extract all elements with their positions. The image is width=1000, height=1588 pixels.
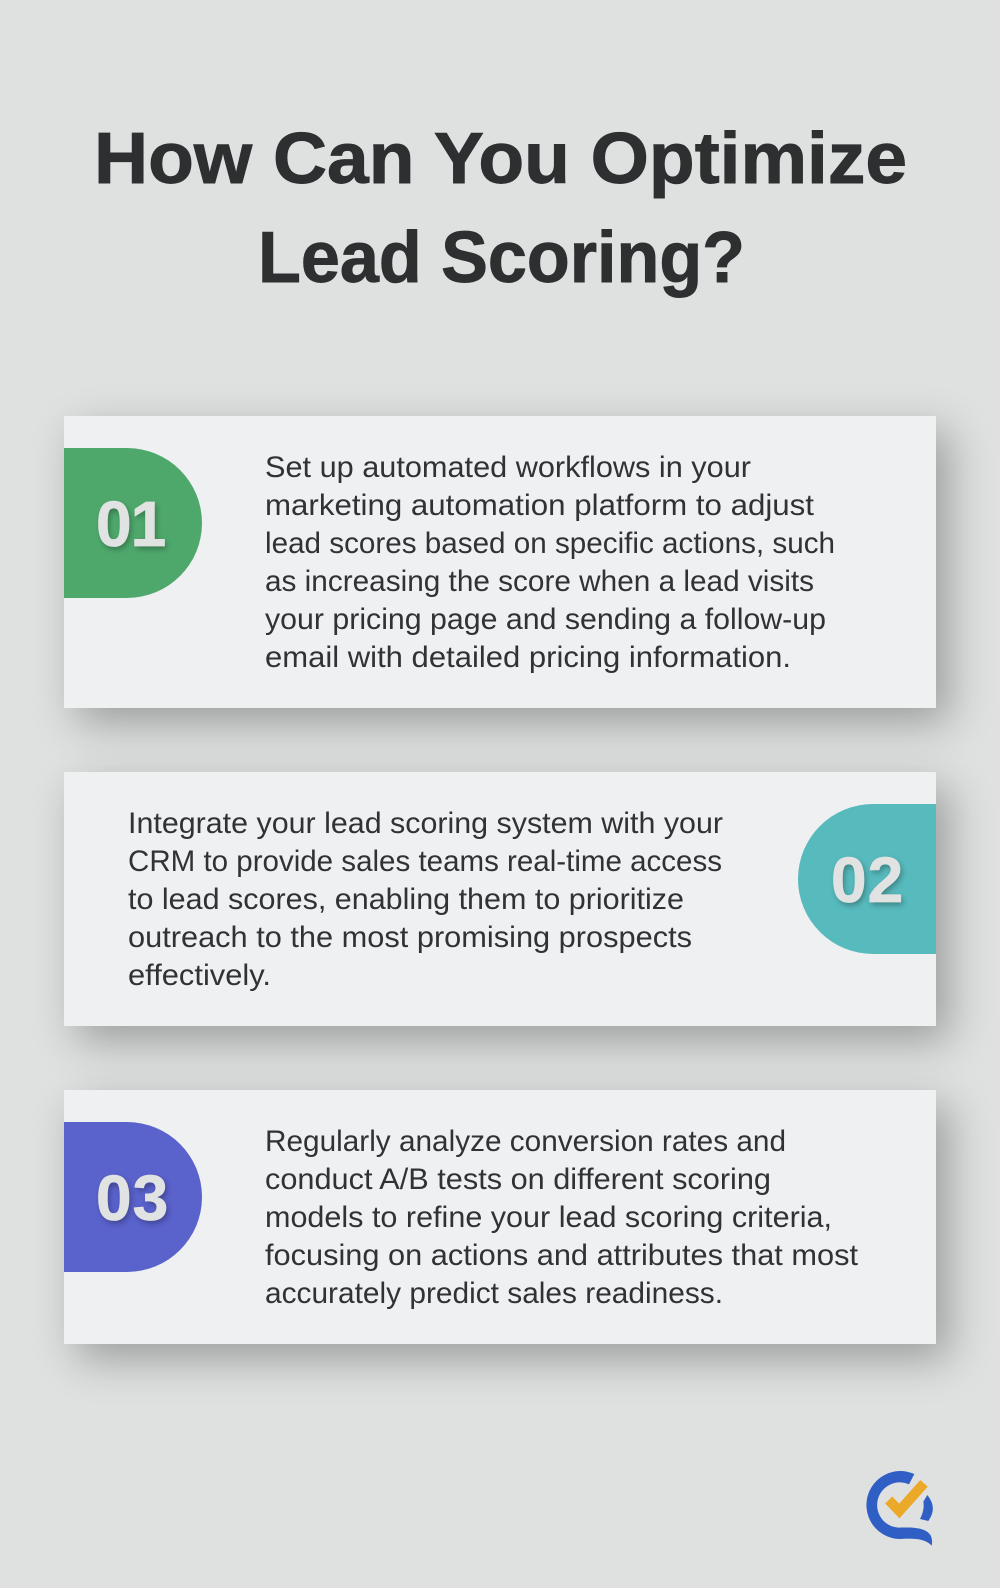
panel: step 02 bbox=[64, 772, 936, 1026]
title: Lead Scoring? bbox=[258, 218, 745, 298]
title: How Can You Optimize bbox=[94, 119, 907, 199]
text block: step 03: conduct A/B tests on different scoring bbox=[265, 1163, 771, 1196]
text block: step 03: accurately predict sales readiness. bbox=[265, 1277, 723, 1310]
text block: step 01: your pricing page and sending a follow-up bbox=[265, 603, 826, 636]
panel: step 03 bbox=[64, 1090, 936, 1344]
icon: logo bbox=[866, 1471, 933, 1546]
text block: step 01 bbox=[265, 451, 835, 674]
number 02: 02 bbox=[831, 844, 904, 916]
badge: 01 bbox=[64, 448, 202, 598]
title bbox=[94, 119, 907, 298]
badge: 02 bbox=[798, 804, 936, 954]
text block: step 02: CRM to provide sales teams real-time access bbox=[128, 845, 722, 878]
text block: step 01: as increasing the score when a lead visits bbox=[265, 565, 814, 598]
text block: step 03: models to refine your lead scoring criteria, bbox=[265, 1201, 832, 1234]
text block: step 02: Integrate your lead scoring system with your bbox=[128, 807, 723, 840]
text block: step 02: effectively. bbox=[128, 959, 271, 992]
text block: step 03: Regularly analyze conversion rates and bbox=[265, 1125, 786, 1158]
panel: step 01 bbox=[64, 416, 936, 708]
text block: step 02: outreach to the most promising prospects bbox=[128, 921, 692, 954]
text block: step 03: focusing on actions and attributes that most bbox=[265, 1239, 858, 1272]
text block: step 01: Set up automated workflows in your bbox=[265, 451, 751, 484]
badge: 03 bbox=[64, 1122, 202, 1272]
number 01: 01 bbox=[96, 488, 165, 560]
number 03: 03 bbox=[96, 1162, 169, 1234]
text block: step 02: to lead scores, enabling them to prioritize bbox=[128, 883, 684, 916]
text block: step 02 bbox=[128, 807, 723, 992]
text block: step 01: email with detailed pricing information. bbox=[265, 641, 791, 674]
text block: step 03 bbox=[265, 1125, 858, 1310]
text block: step 01: lead scores based on specific actions, such bbox=[265, 527, 835, 560]
text block: step 01: marketing automation platform to adjust bbox=[265, 489, 814, 522]
